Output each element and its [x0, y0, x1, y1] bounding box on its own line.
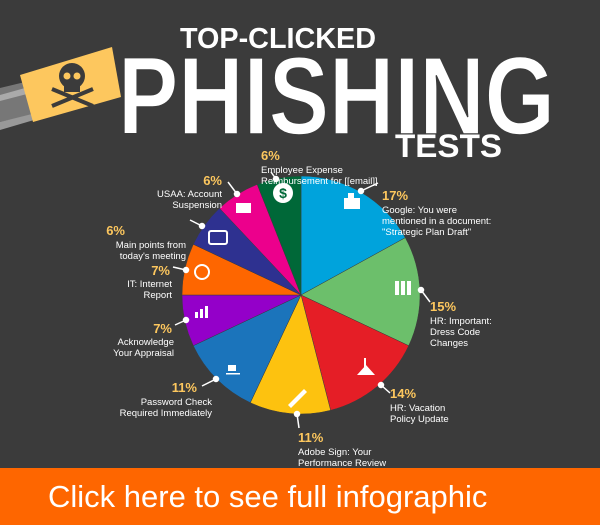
labels: Adobe Sign: Your: [298, 447, 371, 458]
pie chart: [182, 176, 420, 414]
labels: Dress Code: [430, 327, 480, 338]
labels: 7%: [153, 321, 172, 336]
labels: Reimbursement for [[email]]: [261, 176, 378, 187]
labels: Performance Review: [298, 458, 386, 469]
labels: Report: [143, 290, 172, 301]
labels: Employee Expense: [261, 165, 343, 176]
labels: Changes: [430, 338, 468, 349]
labels: IT: Internet: [127, 279, 172, 290]
labels: Policy Update: [390, 414, 449, 425]
labels: 7%: [151, 263, 170, 278]
slice icons: $: [279, 185, 287, 201]
labels: "Strategic Plan Draft": [382, 227, 471, 238]
labels: Password Check: [141, 397, 212, 408]
labels: today's meeting: [120, 251, 186, 262]
labels: USAA: Account: [157, 189, 222, 200]
labels: HR: Vacation: [390, 403, 445, 414]
labels: Your Appraisal: [113, 348, 174, 359]
icon: skull badge: [0, 47, 121, 130]
labels: Suspension: [172, 200, 222, 211]
labels: 14%: [390, 386, 416, 401]
labels: 6%: [203, 173, 222, 188]
labels: Required Immediately: [120, 408, 212, 419]
labels: 6%: [261, 148, 280, 163]
labels: 11%: [172, 380, 197, 395]
labels: Main points from: [116, 240, 186, 251]
labels: mentioned in a document:: [382, 216, 491, 227]
labels: [106, 148, 492, 469]
labels: 15%: [430, 299, 456, 314]
labels: 11%: [298, 430, 324, 445]
labels: Google: You were: [382, 205, 457, 216]
banner: call to action: [0, 468, 600, 525]
labels: 6%: [106, 223, 125, 238]
slice icons: [195, 183, 411, 408]
labels: 17%: [382, 188, 408, 203]
leader lines and dots: [173, 172, 430, 428]
labels: Acknowledge: [117, 337, 174, 348]
labels: HR: Important:: [430, 316, 492, 327]
title: TOP-CLICKED: [180, 23, 376, 55]
title: TESTS: [395, 128, 502, 164]
banner: call to action: Click here to see full infographic: [48, 479, 487, 514]
